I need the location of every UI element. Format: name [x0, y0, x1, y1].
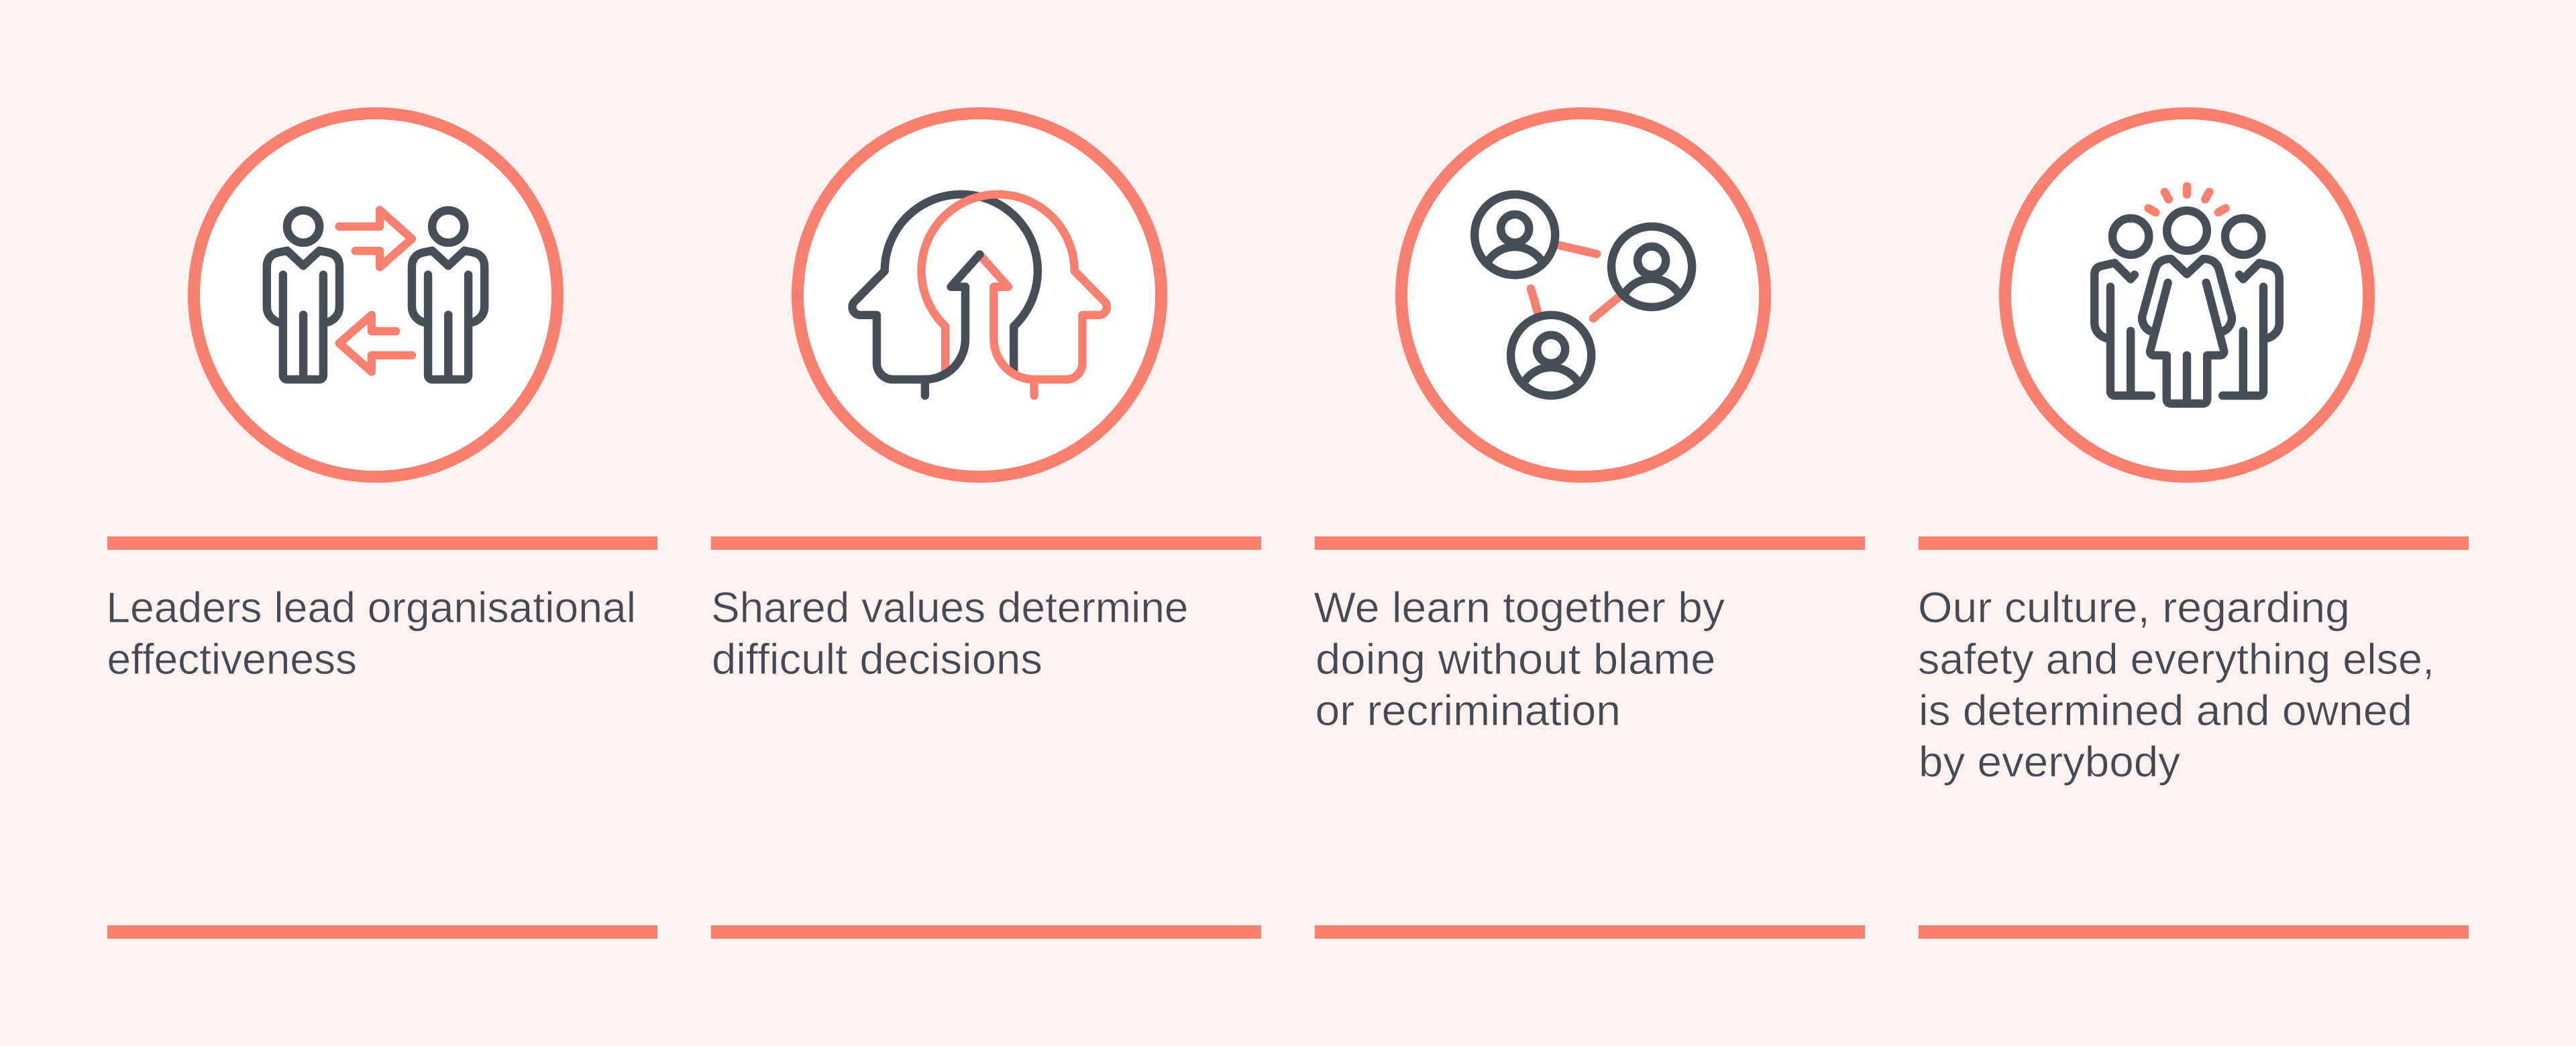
panel: culture — [1918, 113, 2469, 939]
text: shared values — [711, 583, 1189, 683]
bottom divider — [1315, 925, 1865, 939]
text: shared values: difficult decisions — [712, 635, 1042, 683]
text: learn together: doing without blame — [1316, 635, 1716, 683]
icon: two heads with upward arrows — [798, 113, 1161, 477]
text: leaders: Leaders lead organisational — [106, 583, 636, 632]
panel: shared values — [711, 113, 1261, 939]
top divider — [1315, 536, 1865, 550]
text: learn together: or recrimination — [1315, 687, 1621, 735]
text: culture: Our culture, regarding — [1918, 583, 2350, 632]
icon: group of three people with rays — [2005, 113, 2369, 477]
text: leaders — [106, 583, 636, 683]
text: learn together: We learn together by — [1313, 583, 1725, 632]
bottom divider — [107, 925, 657, 939]
bottom divider — [1919, 925, 2469, 939]
top divider — [1919, 536, 2469, 550]
text: leaders: effectiveness — [107, 635, 357, 683]
text: culture: by everybody — [1919, 738, 2180, 786]
icon: two people exchanging arrows — [194, 113, 557, 477]
text: learn together — [1313, 583, 1725, 735]
top divider — [711, 536, 1261, 550]
text: culture: safety and everything else, — [1918, 635, 2434, 683]
bottom divider — [711, 925, 1261, 939]
panel: leaders — [106, 113, 657, 939]
text: shared values: Shared values determine — [711, 583, 1189, 632]
text: culture: is determined and owned — [1919, 687, 2412, 735]
text: culture — [1918, 583, 2434, 786]
icon: three connected people — [1401, 113, 1765, 477]
top divider — [107, 536, 657, 550]
panel: learn together — [1313, 113, 1865, 939]
